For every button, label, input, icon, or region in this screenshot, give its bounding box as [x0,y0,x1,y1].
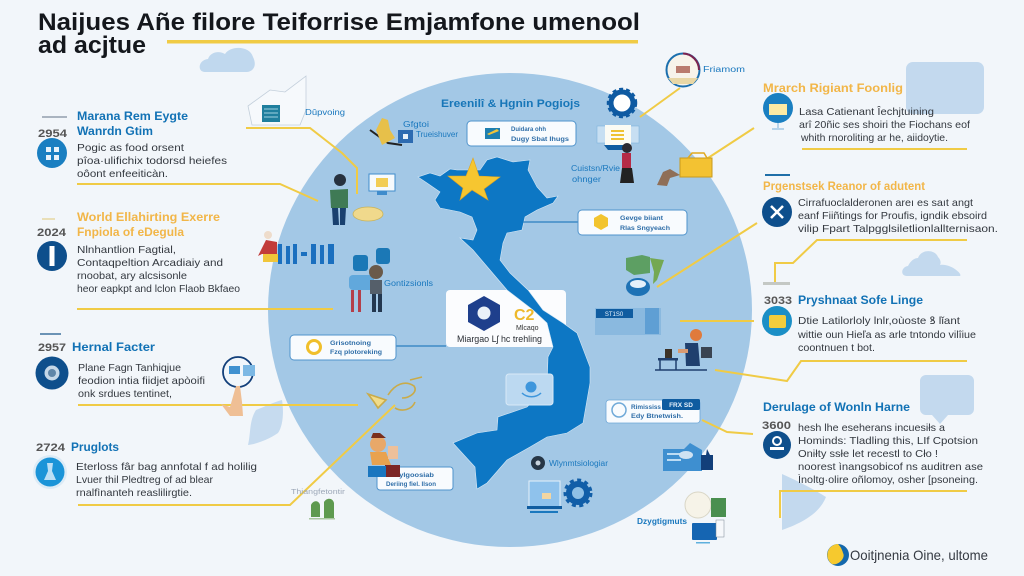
panel: left item 2: rnoobat, ary alcsisonle [77,270,187,282]
panel: right item 3: Pryshnaat Sofe Linge [798,295,923,307]
panel: left item 4: Eterloss fâr bag annfotal f ad holilig [76,461,257,473]
icon: right item 1 [763,93,793,130]
card: right [523,210,687,235]
panel: right item 1: Mrarch Rigiant Foonlig [763,83,903,95]
panel: left item 4: Pruglots [71,442,119,454]
icon: small monitor with bowl [353,174,395,221]
icon: right item 3 [762,306,792,336]
panel: left item 4: Lvuer thil Pledtreg of ad blear [76,474,213,486]
icon: right item 2 [762,197,792,227]
panel: right item 3: Dtie Latilorloly lnlr,oùoste ꝸ lǐant [798,315,960,327]
card: lower right: Rimississ [631,404,661,411]
panel: left item 2: Contaqpeltion Arcadiaiy and [77,257,223,269]
connector lines [77,88,967,518]
icon: house sketch: Dûpvoing [305,108,345,117]
icon: gear top [608,89,636,117]
icon: person with binoculars [368,433,400,477]
card: top [467,121,576,146]
card: right: Gevge biiant [620,215,664,222]
central circle background [268,73,752,547]
footer logo and label [827,544,988,566]
panel: left item 4: rnalfìnanteh reaslilirgtie. [76,487,192,499]
panel: right item 2: Cirrafuoclalderonen areı es saıt angt [798,197,973,209]
panel: left item 3 [36,333,205,400]
footer logo and label: Ooitjnenia Oine, ultome [850,547,988,563]
icon: left item 4 [33,455,67,489]
panel: left item 3: feodion intia fiidjet apòoifi [78,375,205,387]
panel: left item 1: oôont enfeeiticàn. [77,168,168,180]
panel: right item 2: vilip Fpart Talpgglsiletlionlallternisaon. [798,223,998,235]
panel: right item 2 [762,174,998,285]
panel: left item 2: 2024 [37,227,67,239]
panel: left item 2: heor eapkpt and lclon Flaob Bkfaeo [77,283,240,295]
card: right: Rlas Sngyeach [620,225,670,232]
icon: group of people [349,248,433,312]
icon: dark dot with label [531,456,608,470]
title underline [167,40,638,44]
icon: laptop and gear [527,480,591,513]
icon: house sketch [248,76,345,125]
card: top: Duidara ohh [511,126,546,133]
map of Vietnam [418,157,590,489]
icon: person green [330,174,348,225]
card: lower left [377,467,453,490]
panel: left item 1: pîoa·ulifichix todorsd heiefes [77,155,227,167]
card: left: Fzq plotoreking [330,349,382,356]
decorative pale blob left [248,400,283,445]
panel: left item 1: 2954 [38,128,68,140]
icon: left item 3 [36,356,68,390]
stand base [763,282,790,285]
panel: right item 1 [763,83,970,144]
icon: monitor and person [571,125,639,184]
center box: hexagon badge: C2 [514,307,535,324]
icon: hand pointing at circle [221,357,255,416]
icon: plants with label [291,487,346,520]
title: Naijues Añe filore Teiforrise Emjamfone umenool [38,9,640,36]
decorative cloud top left [200,48,255,72]
icon: dark dot with label: Wlynmtsiologiar [549,459,608,468]
icon: blueprint panel: ST1S0 [605,312,624,318]
icon: clock, book, label [637,492,726,544]
icon: person at desk [655,329,712,370]
panel: right item 4: Oniłty ssłe let recestl to Cło ! [798,448,938,460]
panel: left item 2: Nlnhantlion Fagtial, [77,244,176,256]
panel: right item 1: whith rnoroliting ar he, aiidoytie. [800,132,948,144]
center box: hexagon badge: Miargao Lʃ hc trehling [457,334,542,344]
decorative pale triangle [782,474,826,530]
panel: right item 4: Hominds: Tladling this, LIf Cpotsion [798,435,978,447]
panel: right item 4: hesh lhe eseherans incuesiłs a [798,422,945,434]
card: top: Dugy Sbat Ihugs [511,136,569,143]
card: left: Grisotnoing [330,340,371,347]
center box: hexagon badge [446,290,566,347]
icon: reclining figure top: Gfgtoi [403,120,429,129]
card: left [290,335,446,360]
icon: plants with label: Thiangfetontir [291,487,346,496]
icon: floating screen on map [506,374,553,405]
icon: reclining figure top [370,118,458,145]
panel: right item 3: 3033 [764,295,792,307]
icon: package and hand [657,153,712,186]
icon: blueprint panel [595,308,661,335]
panel: right item 4 [762,402,983,486]
panel: right item 4: Derulage of Wonln Harne [763,402,910,414]
panel: left item 1 [37,111,227,180]
icon: right item 4 [763,431,791,459]
panel: right item 4: 3600 [762,420,791,432]
icon: monitor and person: Cuistsn/Rvie [571,164,621,173]
panel: right item 4: noorest ìnangsobicof ns auditren ase [798,461,983,473]
panel: left item 2: Fnpiola of eDegula [77,227,185,239]
panel: right item 2: Prgenstsek Reanor of adutent [763,181,925,193]
icon: red figure and blue bars [258,231,334,264]
title: ad acjtue [38,32,146,59]
icon: clock, book, label: Dzygtigmuts [637,517,688,526]
panel: left item 4: 2724 [36,442,66,454]
heading inside circle: Ereenilî & Hgnin Pogiojs [441,98,580,110]
panel: right item 3: coontnuen t bot. [798,342,875,354]
panel: left item 3: 2957 [38,342,66,354]
icon: building and figures [663,443,713,471]
icon: bird line art [368,377,422,410]
decorative pale rectangle top right [906,62,984,114]
panel: left item 1: Wanrdn Gtim [77,126,153,138]
panel: left item 2: World Ellahirting Exerre [77,212,220,224]
panel: left item 3: Plane Fagn Tanhiqjue [78,362,181,374]
panel: right item 2: eanf Fiiñtings for Proufis, igndik ebsoird [798,210,987,222]
panel: left item 1: Marana Rem Eygte [77,111,188,123]
panel: left item 3: Hernal Facter [72,342,156,354]
icon: left item 2 [37,241,67,271]
panel: left item 4 [33,442,257,499]
card: lower right: FRX SD [669,402,693,409]
panel: right item 1: arî 20ñic ses shoiri the Fiochans eof [799,119,970,131]
card: lower left: Mylgoosiab [393,472,434,479]
icon: group of people: Gontizsionls [384,279,433,288]
card: lower right: Edy Btnetwish. [631,413,683,420]
icon: left item 1 [37,138,67,168]
panel: right item 3: wittie oun Hieľa as arle tntondo vilîiue [797,329,976,341]
icon: reclining figure top: Trueishuver [416,130,458,139]
panel: left item 3: onk srdues tentinet, [78,388,172,400]
title [38,9,640,59]
icon: star [448,158,500,200]
card: lower right [606,399,700,423]
panel: left item 1: Pogic as food orsent [77,142,184,154]
icon: green map and blue device [626,255,664,296]
panel: right item 4: Ìnoltg·olire oñlomoy, osher [psoneing. [798,473,978,486]
decorative speech bubble right [920,375,974,424]
center box: hexagon badge: Mlcaqo [516,325,539,332]
icon: badge top [666,54,745,86]
panel: left item 2 [37,212,240,295]
icon: monitor and person: ohnger [572,175,601,184]
card: lower left: Deriing fiel. Ilson [386,481,436,488]
icon: badge top: Friamom [703,65,745,74]
decorative cloud right [902,251,960,276]
panel: right item 1: Lasa Catienant Îechjtuining [799,105,934,118]
panel: right item 3 [762,295,976,354]
